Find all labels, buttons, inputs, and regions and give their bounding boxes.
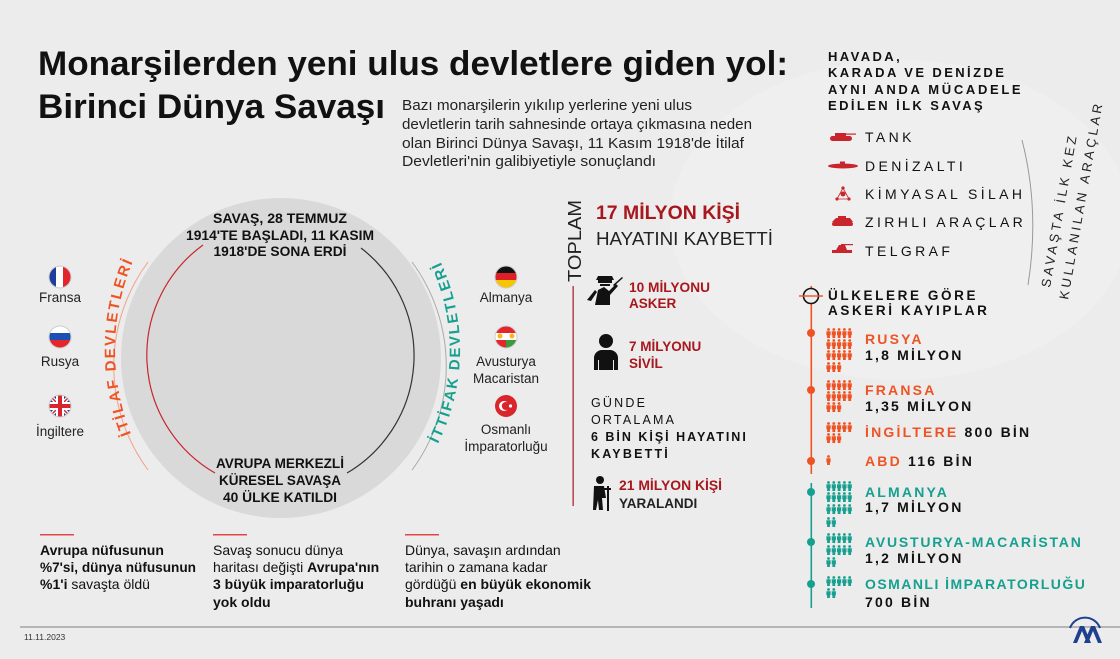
fact: empires: Savaş sonucu dünya [213,542,343,558]
curved label: first used: SAVAŞTA İLK KEZ [1038,132,1080,289]
globe text: start/end dates: SAVAŞ, 28 TEMMUZ [213,210,347,226]
icon: crosshair [799,288,823,304]
flag: Russia [49,326,71,348]
fact: economic crisis: Dünya, savaşın ardından [405,542,561,558]
icons: UK 8 [826,422,852,443]
daily deaths: ORTALAMA [591,413,676,427]
heading: ÜLKELERE GÖRE [828,288,978,303]
globe text: 40 countries [216,455,344,505]
weapon list: DENİZALTI [865,157,966,174]
total casualties column: HAYATINI KAYBETTİ [596,229,773,249]
heading: AYNI ANDA MÜCADELE [828,82,1023,97]
title [38,45,788,126]
ittifak label: İTTİFAK DEVLETLERİ [426,262,460,444]
country labels: 1,35 MİLYON [865,398,974,414]
ally names: İngiltere [36,424,84,439]
globe text: start/end dates: 1918'DE SONA ERDİ [214,243,346,259]
heading: KARADA VE DENİZDE [828,65,1006,80]
icon: submarine [828,162,858,168]
fact: population [40,534,196,592]
soldiers text: ASKER [629,296,677,311]
heading [828,49,1023,113]
country labels: AVUSTURYA-MACARİSTAN [865,534,1083,550]
icons: Austria-Hungary 12 [826,533,852,567]
country labels: 1,7 MİLYON [865,499,964,515]
flag: Ottoman [495,395,517,417]
icons: Germany 17 [826,481,852,527]
timeline [810,286,812,474]
civilians text: SİVİL [629,356,663,371]
logo: AA [1070,618,1102,643]
globe text: 40 countries: 40 ÜLKE KATILDI [223,489,337,505]
central power names: Almanya [480,290,533,305]
globe: europe circle [114,198,446,518]
fact: economic crisis [405,534,591,610]
fact: empires: 3 büyük imparatorluğu [213,576,364,592]
flag: France [49,266,71,288]
heading [828,288,990,318]
soldiers text: 10 MİLYONU [629,280,710,295]
globe text: start/end dates: 1914'TE BAŞLADI, 11 KASIM [186,227,374,243]
ally names: Fransa [39,290,81,305]
daily deaths: 6 BİN KİŞİ HAYATINI [591,429,748,444]
icon: armoured vehicle [832,216,853,226]
weapon list: ZIRHLI ARAÇLAR [865,214,1026,230]
icons: USA 1 [826,455,831,465]
fact: economic crisis: tarihin o zamana kadar [405,559,548,575]
country labels: İNGİLTERE 800 BİN [865,424,1031,440]
subtitle: Bazı monarşilerin yıkılıp yerlerine yeni ulus [402,98,692,114]
fact: economic crisis: gördüğü en büyük ekonomik [405,576,591,592]
globe text: 40 countries: AVRUPA MERKEZLİ [216,455,344,471]
soldiers text [629,280,710,311]
central power names [464,290,548,454]
country labels: RUSYA [865,331,924,347]
icons: Ottoman 7 [826,576,852,598]
icon: civilian [594,334,618,370]
daily deaths [591,396,748,461]
heading: EDİLEN İLK SAVAŞ [828,98,985,113]
curved label: first used: KULLANILAN ARAÇLAR [1056,100,1106,301]
daily deaths: GÜNDE [591,396,647,410]
fact: empires: yok oldu [213,594,271,610]
globe text: 40 countries: KÜRESEL SAVAŞA [219,472,341,488]
total casualties column [565,200,773,511]
wounded text: 21 MİLYON KİŞİ [619,478,722,493]
daily deaths: KAYBETTİ [591,446,670,461]
allies: flags [36,266,84,439]
headline number: 17 MİLYON KİŞİ [596,203,740,224]
country labels: 700 BİN [865,594,932,610]
panel: first war on air land sea [828,49,1106,301]
wounded text: YARALANDI [619,496,697,511]
weapon list: TANK [865,129,915,145]
footer line [20,626,1120,628]
fact: empires [213,534,379,610]
icons: Russia 18 [826,328,852,372]
weapon list: TELGRAF [865,243,953,259]
central power names: Avusturya [476,354,536,369]
wounded text [619,478,722,511]
itilaf label: İTİLAF DEVLETLERİ [104,258,132,438]
ally names [36,290,84,439]
subtitle [402,98,752,170]
fact: population: %7'si, dünya nüfusunun [40,559,196,575]
country labels: ABD 116 BİN [865,453,974,469]
weapon list [865,129,1026,259]
central power names: Macaristan [473,371,539,386]
date: 11.11.2023 [24,632,66,642]
panel: military losses by country [799,286,1087,610]
flag: Austria-Hungary [495,326,517,348]
subtitle: olan Birinci Dünya Savaşı, 11 Kasım 1918'de İtilaf [402,134,745,152]
dots [807,329,815,465]
fact: empires: haritası değişti Avrupa'nın [213,559,379,575]
icon: telegraph [832,244,853,253]
icons: France 13 [826,380,852,412]
country labels: 1,2 MİLYON [865,550,964,566]
central power names: Osmanlı [481,422,531,437]
icon: wounded [593,476,611,511]
title: Monarşilerden yeni ulus devletlere giden yol: [38,45,788,83]
flag: UK [49,395,71,417]
heading: ASKERİ KAYIPLAR [828,303,990,318]
weapon list: KİMYASAL SİLAH [865,185,1025,202]
country labels: OSMANLI İMPARATORLUĞU [865,575,1087,592]
country labels [865,331,1087,610]
country labels: 1,8 MİLYON [865,347,964,363]
central power names: İmparatorluğu [464,439,548,454]
ally names: Rusya [41,354,80,369]
country labels: FRANSA [865,382,937,398]
fact: economic crisis: buhranı yaşadı [405,594,504,610]
icon: chemical [835,186,851,201]
icon: tank [830,133,856,141]
subtitle: Devletleri'nin galibiyetiyle sonuçlandı [402,154,656,170]
civilians text [629,339,701,371]
curved label: first used [1022,100,1106,301]
central powers: flags [464,266,548,454]
heading: HAVADA, [828,49,902,64]
subtitle: devletlerin tarih sahnesinde ortaya çıkmasına neden [402,117,752,133]
civilians text: 7 MİLYONU [629,339,701,354]
flag: Germany [495,266,517,288]
country labels: ALMANYA [865,484,949,500]
fact: population: %1'i savaşta öldü [40,576,150,592]
icon: soldier [587,276,623,305]
toplam label: TOPLAM [565,200,585,282]
globe text: start/end dates [186,210,374,259]
fact: population: Avrupa nüfusunun [40,542,164,558]
title: Birinci Dünya Savaşı [38,88,385,126]
